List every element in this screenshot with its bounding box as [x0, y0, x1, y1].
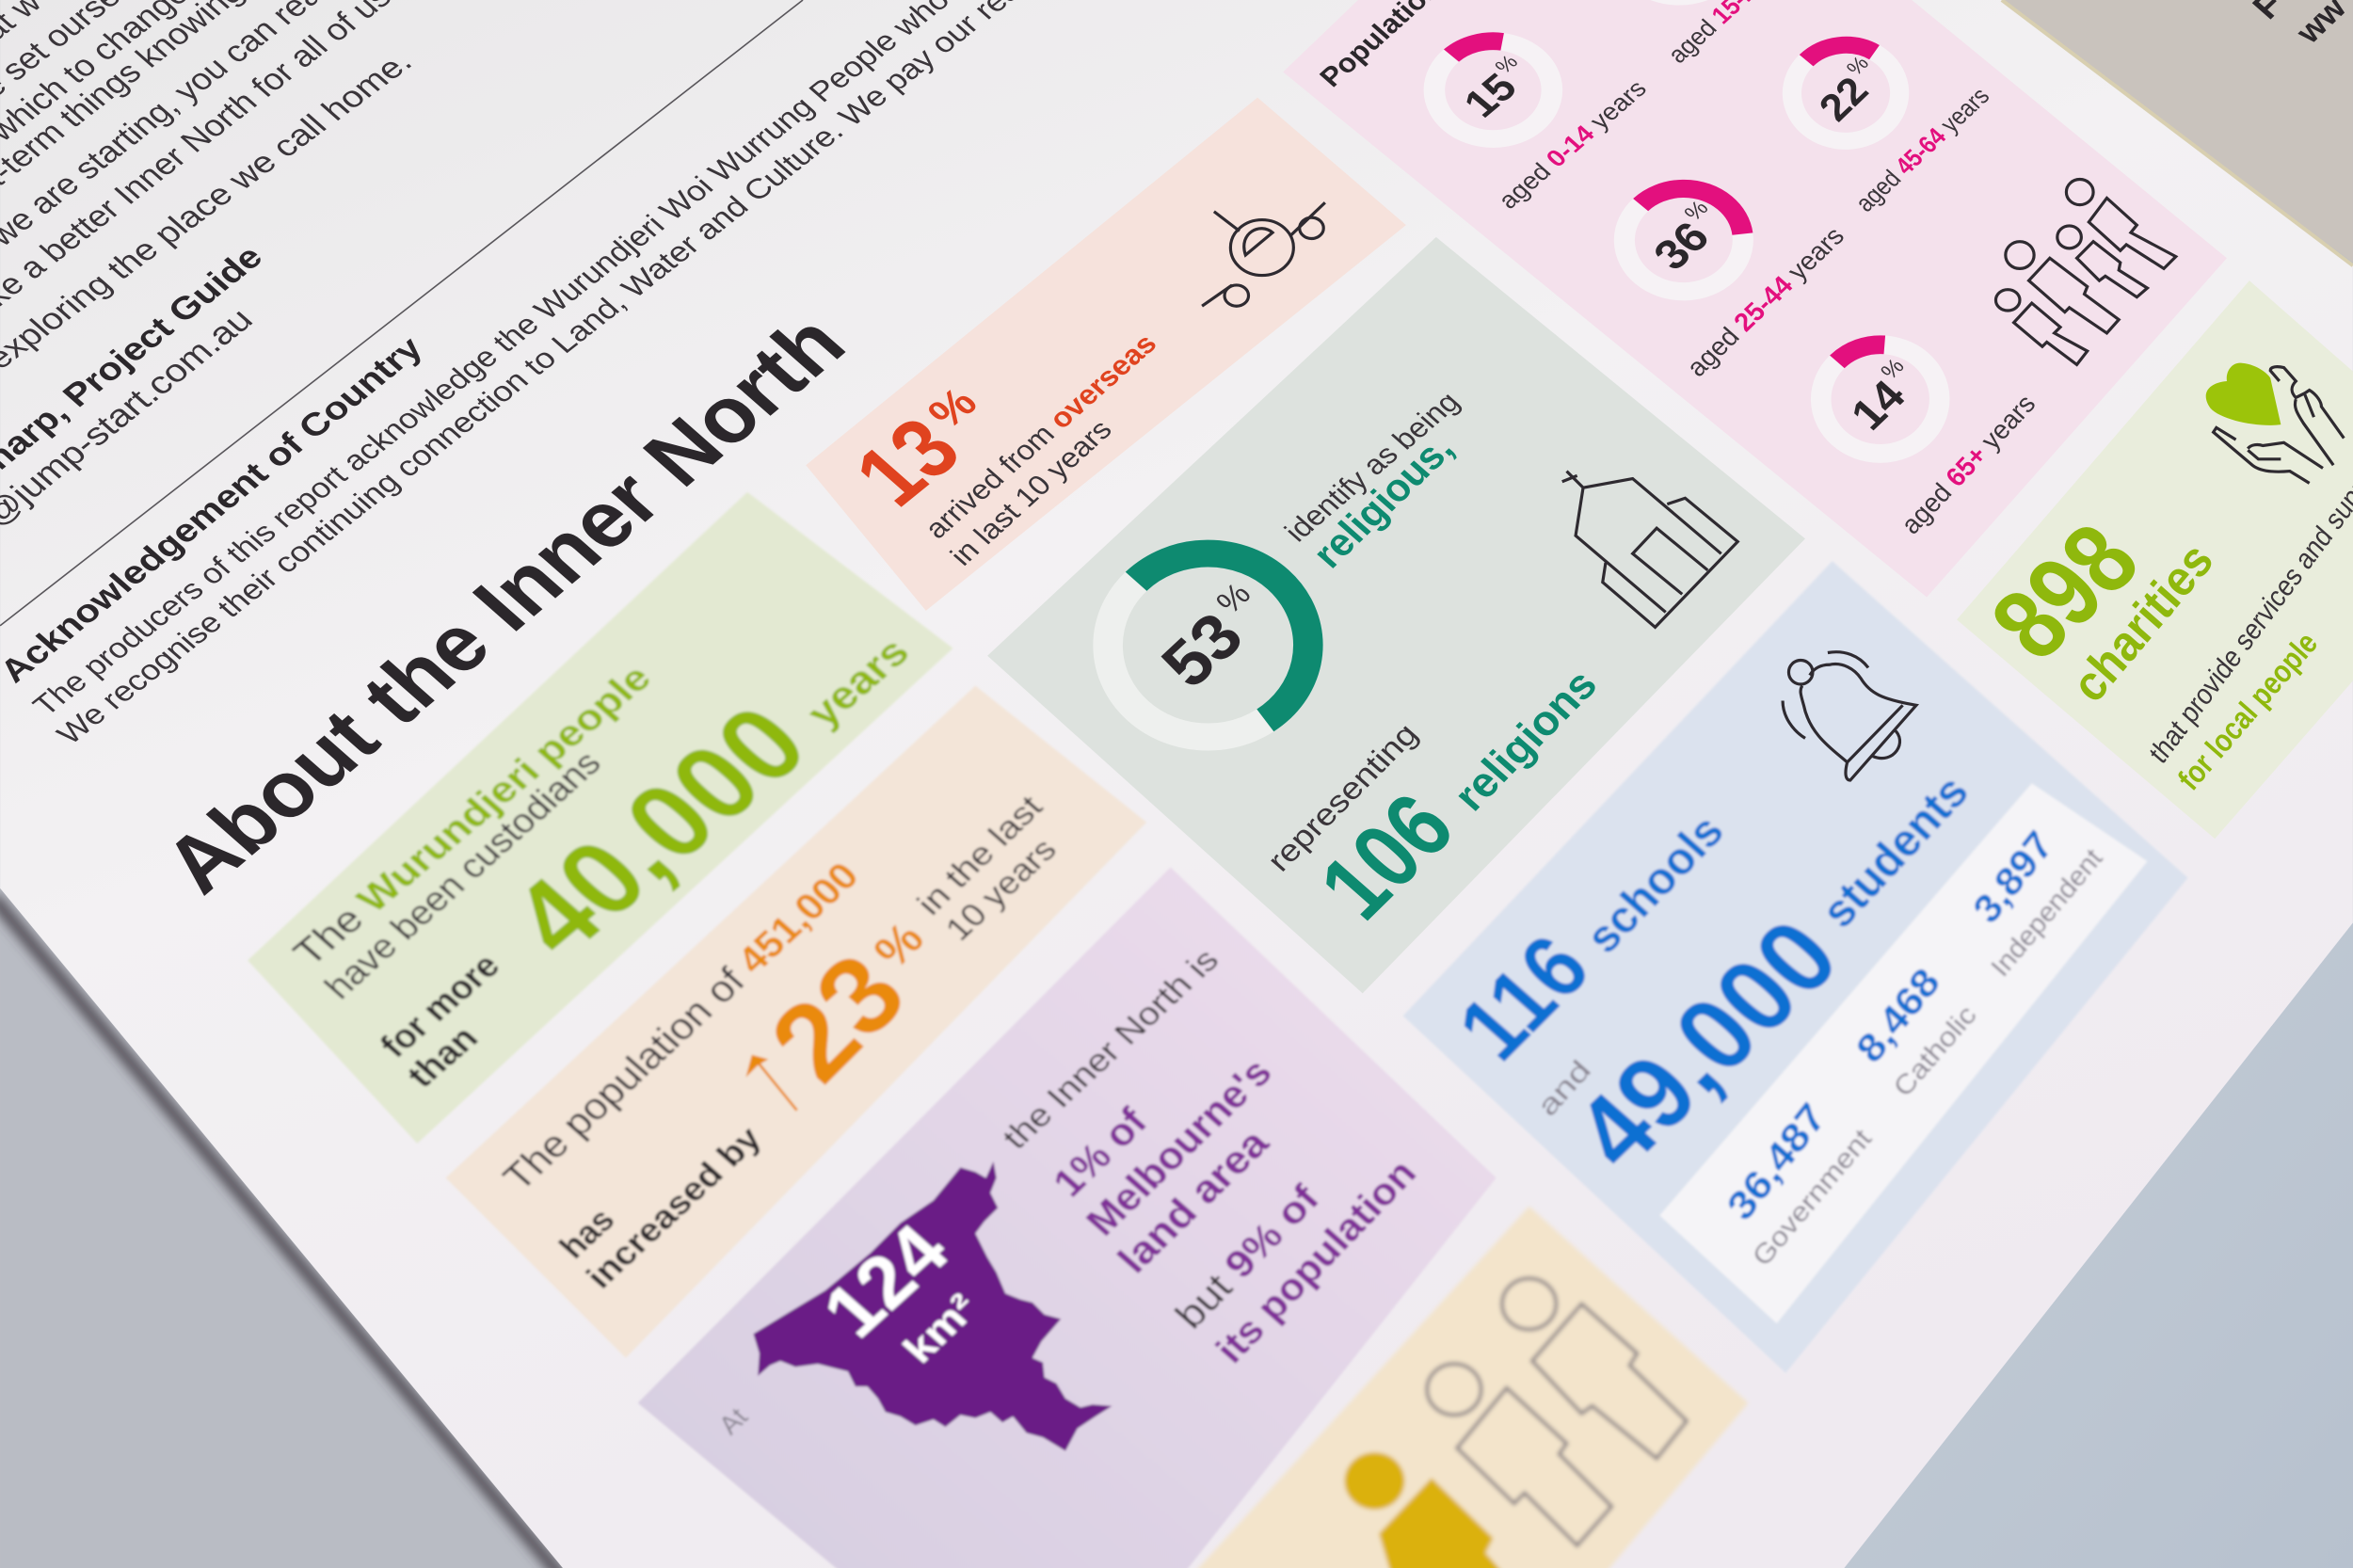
panel: Wurundjeri custodians	[248, 492, 952, 1144]
icon: plane	[1202, 202, 1325, 306]
106 religions	[1261, 660, 1607, 938]
116 schools: schools	[1577, 806, 1734, 963]
106 religions: 106	[1299, 775, 1474, 938]
panel: household people	[1178, 1207, 1748, 1568]
icon: person outline right	[1502, 1278, 1687, 1459]
independent students: Independent	[1986, 843, 2108, 983]
has increased by: increased by	[579, 1119, 769, 1295]
panel: population growth	[446, 686, 1146, 1358]
map of Inner North	[753, 1161, 1112, 1451]
Inner North is: the Inner North is	[996, 942, 1226, 1156]
background top right sheet	[1995, 0, 2353, 263]
government students: Government	[1747, 1124, 1878, 1272]
catholic students: Catholic	[1888, 1000, 1982, 1103]
independent students	[1964, 822, 2108, 983]
donut: 14 percent	[1797, 322, 1964, 476]
panel: schools	[1403, 561, 2188, 1373]
13 percent figure: 13	[835, 400, 980, 523]
icon: people group	[1995, 180, 2176, 364]
23 percent figure: 23	[744, 931, 930, 1104]
catholic students: 8,468	[1849, 960, 1948, 1071]
13 percent figure: %	[919, 379, 987, 438]
title: About the Inner North	[146, 298, 864, 910]
last ten years: in the last	[910, 789, 1050, 921]
donut: 36 percent	[1600, 168, 1768, 312]
religious text: identify as being	[1277, 386, 1466, 548]
arrow: up	[745, 1055, 797, 1111]
donut: 36 percent: %	[1679, 196, 1714, 226]
last ten years	[910, 789, 1064, 947]
donut: 53 percent: %	[1209, 576, 1258, 620]
icon: heart	[2206, 363, 2281, 425]
panel: population by age	[1283, 0, 2227, 598]
religious text: religious,	[1305, 426, 1463, 576]
124 km2 label: km²	[894, 1286, 986, 1371]
page edge highlight	[2002, 0, 2353, 265]
donut: 15 percent: %	[1490, 51, 1523, 78]
898 figure: 898	[1968, 504, 2161, 680]
49,000 students: 49,000	[1551, 899, 1862, 1191]
panel: charities	[1957, 280, 2353, 839]
label: aged 65+: aged 65+ years	[1896, 390, 2041, 540]
one percent of land: 1% of	[1045, 1099, 1157, 1205]
donut: 15 percent	[1410, 21, 1577, 159]
rule	[0, 0, 803, 626]
label: aged 0-14: aged 0-14 years	[1492, 74, 1652, 214]
inner white box	[1659, 783, 2147, 1323]
label: aged 45-64: aged 45-64 years	[1849, 82, 1995, 216]
nine percent of population: but 9% of	[1167, 1177, 1328, 1336]
116 schools	[1438, 806, 1734, 1079]
49,000 students	[1551, 766, 1978, 1191]
years: years	[798, 631, 919, 735]
donut: 15 percent: 15	[1455, 66, 1527, 125]
panel: religion	[987, 237, 1805, 993]
charities word: charities	[2061, 533, 2224, 712]
population text: The population of 451,000	[495, 855, 867, 1198]
donut: 53 percent: 53	[1147, 600, 1257, 701]
donut: 36 percent: 36	[1644, 214, 1720, 279]
icon: church	[1562, 472, 1737, 627]
icon: bell	[1783, 652, 1916, 780]
government students: 36,487	[1719, 1094, 1833, 1228]
independent students: 3,897	[1964, 822, 2061, 932]
background surface bottom right	[1838, 915, 2353, 1568]
government students	[1719, 1094, 1878, 1272]
one percent of land: Melbourne's	[1078, 1050, 1281, 1244]
overseas caption: arrived from overseas	[919, 328, 1163, 545]
icon: hands	[2214, 367, 2344, 483]
116 schools: 116	[1438, 917, 1609, 1079]
custodians second line: have been custodians	[316, 744, 609, 1006]
page shadow	[0, 897, 563, 1568]
for more than: than	[399, 1019, 487, 1095]
icon: person outline middle	[1427, 1364, 1611, 1545]
acknowledgement of country: The producers of this report acknowledge the Wurundjeri Woi Wurrung People who	[25, 0, 956, 722]
donut: 22 percent: 22	[1810, 70, 1878, 129]
has increased by: has	[552, 1201, 622, 1265]
and: and	[1531, 1055, 1597, 1122]
label: aged 25-44: aged 25-44 years	[1681, 222, 1850, 382]
106 religions: representing	[1261, 717, 1425, 878]
for more than: for more	[372, 947, 508, 1064]
donut: 15-24	[1596, 0, 1762, 17]
donut: 22 percent	[1769, 25, 1922, 161]
40,000 figure: 40,000	[485, 683, 832, 978]
124 km2 label: 124	[806, 1209, 966, 1352]
panel: overseas arrivals	[806, 98, 1406, 611]
donut: 22 percent: %	[1842, 52, 1874, 80]
overseas caption: in last 10 years	[944, 414, 1118, 571]
At: At	[713, 1402, 754, 1440]
acknowledgement of country: Acknowledgement of Country	[0, 329, 430, 689]
23 percent figure: %	[863, 912, 934, 978]
last ten years: 10 years	[938, 832, 1064, 947]
custodians text: The Wurundjeri people	[284, 657, 660, 973]
donut: 14 percent: 14	[1842, 372, 1915, 440]
icon: person filled	[1345, 1452, 1518, 1568]
donut: 14 percent: %	[1876, 354, 1910, 384]
charities caption: for local people	[2172, 626, 2325, 797]
49,000 students: students	[1812, 766, 1978, 937]
catholic students	[1849, 960, 1982, 1103]
nine percent of population: its population	[1207, 1151, 1424, 1371]
donut: 53 percent	[1066, 516, 1350, 775]
one percent of land: land area	[1109, 1121, 1279, 1282]
panel: land area	[638, 867, 1497, 1568]
106 religions: religions	[1444, 660, 1607, 820]
